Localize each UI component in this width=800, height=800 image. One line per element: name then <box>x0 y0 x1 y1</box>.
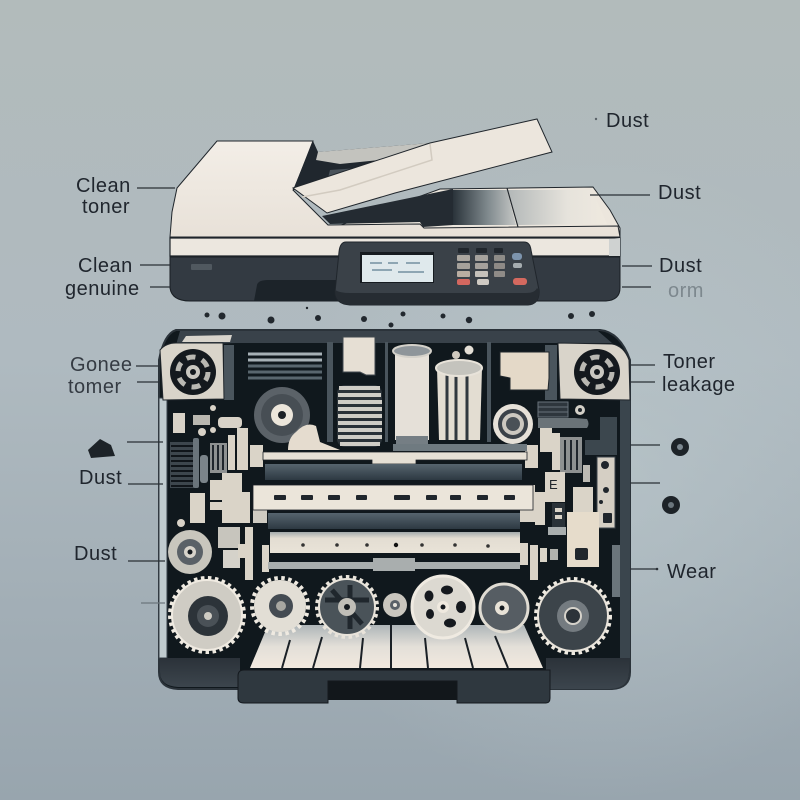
panel screen <box>360 252 434 283</box>
side block stack <box>538 402 568 417</box>
left fan <box>160 343 224 400</box>
grey trapezoid row <box>393 444 527 451</box>
printer shell <box>159 330 630 689</box>
right side plates <box>567 457 615 567</box>
column pillars <box>224 342 557 442</box>
lower unit: printer interior <box>159 330 630 703</box>
scanner right flatbed lid <box>300 187 620 240</box>
gear 5 perforated <box>412 576 474 638</box>
small ring <box>575 405 585 415</box>
striped canister <box>436 346 482 440</box>
right bracket cluster <box>520 428 593 580</box>
paper tray keys <box>250 625 543 668</box>
labels left <box>65 175 140 565</box>
large gear right <box>536 579 610 653</box>
right fan <box>558 343 630 400</box>
label: dust left 1: Dust <box>79 467 122 489</box>
document feeder body <box>170 141 620 237</box>
usb slot <box>191 264 212 270</box>
feeder throat <box>293 141 430 190</box>
small pulley <box>383 593 407 617</box>
label: toner leakage <box>662 351 736 396</box>
top frame bar <box>176 331 612 345</box>
label: clean genuine <box>65 255 140 300</box>
labels right <box>595 110 736 583</box>
vent grille <box>248 354 322 378</box>
front tray handle notch <box>327 680 458 700</box>
gear 2 <box>252 578 308 634</box>
gear 6 <box>480 584 528 632</box>
toner blob right <box>671 438 689 456</box>
grey bar <box>538 418 588 428</box>
falling dust specks <box>204 307 595 328</box>
right dark block <box>585 417 617 455</box>
lower cream bar <box>270 532 520 553</box>
leader lines <box>127 188 660 603</box>
label: dust right 2: Dust <box>659 255 702 277</box>
toner blob left <box>88 439 115 458</box>
left wall strip <box>159 398 167 658</box>
label: clean toner <box>76 175 131 218</box>
label: clean genuine: Clean <box>78 255 133 277</box>
lower grey rail with tab <box>268 558 520 571</box>
cylinder filter <box>393 345 431 444</box>
front tray handle <box>238 670 550 703</box>
toner blob <box>288 424 340 450</box>
large gear left <box>170 578 244 652</box>
right chain <box>612 545 620 597</box>
label: faded text: orm <box>668 280 704 302</box>
label: dust right 1: Dust <box>658 182 701 204</box>
left foot <box>160 658 240 687</box>
control panel <box>335 242 539 305</box>
label: dust top: Dust <box>606 110 649 132</box>
gear 3 <box>317 577 377 637</box>
label: wear: Wear <box>667 561 716 583</box>
dark lower body <box>170 257 620 301</box>
middle dark roller <box>268 513 520 529</box>
hanging cartridge <box>343 337 375 375</box>
label: clean genuine: genuine <box>65 278 140 300</box>
output shadow under tray <box>322 189 453 227</box>
left small parts <box>173 405 242 527</box>
label: clean toner: Clean <box>76 175 131 197</box>
label: gonee tomer: tomer <box>68 376 122 398</box>
label: gonee tomer: Gonee <box>70 354 133 376</box>
left side gear stack <box>170 438 208 488</box>
dark roller disc <box>254 387 310 443</box>
label: toner leakage: Toner <box>663 351 716 373</box>
label: gonee tomer <box>68 354 133 398</box>
small side wheel <box>168 530 212 574</box>
left bracket cluster <box>190 428 269 580</box>
toner dot right <box>662 496 680 514</box>
label: dust left 2: Dust <box>74 543 117 565</box>
upper unit: scanner <box>170 119 620 305</box>
small block assembly <box>500 352 549 390</box>
right foot <box>546 658 629 689</box>
right wall strip <box>620 398 630 658</box>
label: toner leakage: leakage <box>662 374 736 396</box>
coiled roll <box>493 404 533 444</box>
label: clean toner: toner <box>82 196 130 218</box>
keypad buttons <box>457 248 527 285</box>
top cream rail <box>263 452 527 464</box>
perforated cream bar <box>253 485 533 510</box>
upper dark roller <box>265 464 522 480</box>
front cream band <box>170 238 620 256</box>
E label block: E <box>549 477 558 492</box>
spring coil <box>337 385 382 447</box>
paper tray <box>293 119 552 213</box>
